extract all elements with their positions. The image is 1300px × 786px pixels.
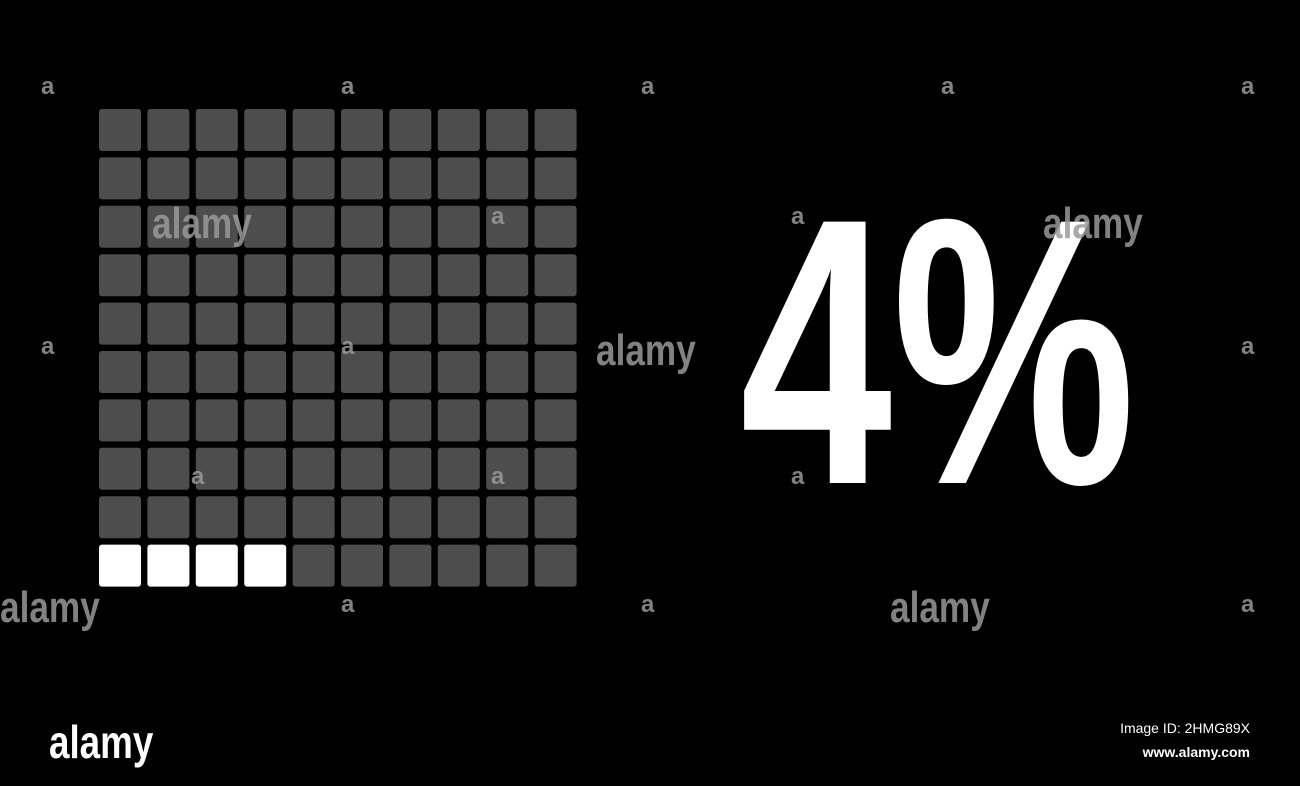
watermarks: a [41, 333, 55, 360]
percentage value: 4% [740, 140, 1135, 564]
watermarks: a [491, 203, 505, 230]
watermarks: alamy [0, 583, 100, 632]
watermarks: a [641, 591, 655, 618]
watermarks [0, 73, 1255, 632]
watermarks: a [341, 591, 355, 618]
watermarks: a [1241, 73, 1255, 100]
watermarks: a [1241, 591, 1255, 618]
watermarks: a [791, 463, 805, 490]
logo: alamy: alamy [49, 716, 153, 768]
watermarks: alamy [890, 583, 990, 632]
image id text: Image ID: 2HMG89X [1120, 720, 1251, 736]
watermarks: alamy [596, 326, 696, 375]
watermarks: alamy [152, 199, 252, 248]
watermarks: a [41, 73, 55, 100]
watermarks: a [941, 73, 955, 100]
watermarks: a [791, 203, 805, 230]
watermarks: a [641, 73, 655, 100]
watermarks: a [1241, 333, 1255, 360]
watermarks: a [341, 333, 355, 360]
image id text: www.alamy.com [1142, 744, 1250, 760]
watermarks: alamy [1043, 199, 1143, 248]
watermarks: a [191, 463, 205, 490]
filled squares (4%) [99, 545, 286, 587]
watermarks: a [491, 463, 505, 490]
watermarks: a [341, 73, 355, 100]
waffle chart [99, 109, 577, 587]
image id text [1120, 720, 1251, 760]
